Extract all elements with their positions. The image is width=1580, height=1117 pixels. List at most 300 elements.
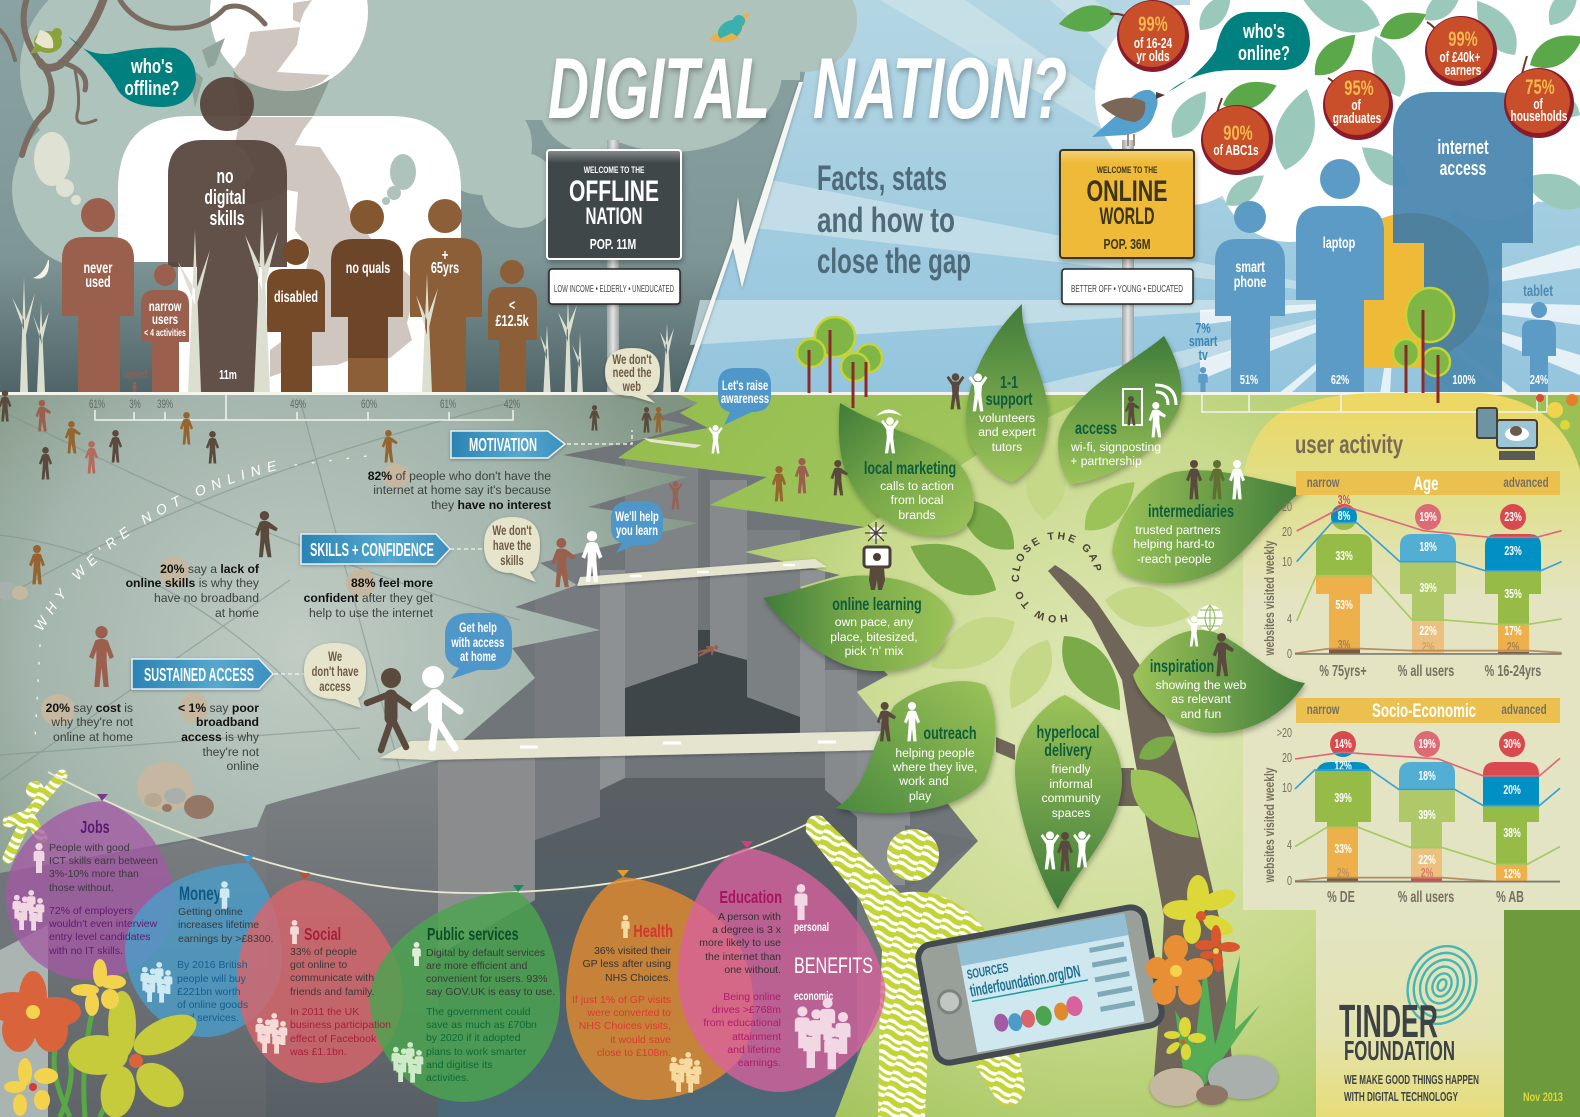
balloon text: social: friends and family.: [290, 986, 374, 998]
offline person labels: 65yrs: [431, 259, 459, 276]
chart figure: all users socio: 39%: [1418, 809, 1436, 822]
balloon text: money: £221bn worth: [177, 986, 241, 998]
speech: we don't have access: [304, 643, 366, 708]
outreach text: outreach: [923, 724, 977, 744]
chart figure: all users socio: 22%: [1418, 854, 1436, 867]
local marketing text: from local: [891, 493, 943, 507]
balloon text: money: Getting online: [178, 906, 243, 918]
panel: user activity: [1243, 393, 1580, 910]
speech bubble: who's offline: [68, 36, 196, 107]
balloon text: money: earnings by >£8300.: [178, 933, 273, 945]
sign: offline nation: NATION: [586, 203, 642, 230]
access text: [1070, 419, 1161, 468]
statistic: broadband: broadband: [196, 715, 259, 729]
1-1 support text: and expert: [978, 425, 1036, 439]
balloon text: jobs: 3%-10% more than: [49, 868, 139, 880]
hyperlocal delivery text: friendly: [1051, 762, 1092, 776]
chart figure: DE: 33%: [1334, 843, 1352, 856]
sign post: offline: [607, 140, 619, 410]
person: yellow sun figure: [1364, 215, 1424, 368]
speech: get help with access at home: [445, 613, 512, 679]
logo: tinder foundation: [1339, 995, 1455, 1066]
balloon text: jobs: with no IT skills.: [48, 945, 123, 957]
tablet device: tinderfoundation.org/DN: [968, 962, 1082, 1001]
offline person labels: 11m: [219, 369, 237, 382]
speech: we don't have access: access: [319, 679, 351, 694]
curved label: why we're not online: WHY WE'RE NOT ONLINE: [34, 460, 276, 630]
axis label: age chart: websites visited weekly: [1261, 540, 1277, 656]
speech: we don't need the web: We don't: [612, 352, 652, 367]
apple: graduates: [1306, 26, 1393, 140]
balloon text: health: If just 1% of GP visits: [572, 994, 671, 1006]
chart figure: all users age: 22%: [1419, 625, 1437, 638]
chart figure: AB: 12%: [1503, 868, 1521, 881]
balloon text: public services: activities.: [426, 1072, 469, 1084]
chart: socio axis ticks: 4: [1287, 839, 1292, 852]
chart figure: 75yrs: [1316, 494, 1372, 654]
speech bubble: who's offline: who's: [130, 56, 173, 78]
balloon text: health: 36% visited their: [594, 945, 671, 957]
person: internet access: [1393, 92, 1533, 393]
online learning text: place, bitesized,: [830, 630, 918, 644]
sun disc: [1333, 213, 1489, 361]
chart figure: DE: 12%: [1334, 760, 1352, 773]
speech: let's raise awareness: [718, 368, 771, 425]
online learning text: pick 'n' mix: [845, 644, 903, 658]
speech bubble: who's online: who's: [1242, 21, 1285, 43]
balloon text: education and benefits: from educational: [703, 1017, 781, 1029]
label: smart tv: tv: [1198, 346, 1208, 363]
balloon text: health: were converted to: [587, 1007, 671, 1019]
intermediaries text: intermediaries: [1148, 502, 1234, 522]
chart: socio axis ticks: 0: [1287, 875, 1292, 888]
inspiration text: inspiration: [1150, 657, 1214, 677]
tag: motivation: [451, 431, 565, 458]
inspiration text: and fun: [1181, 707, 1221, 721]
chasm base: [0, 393, 1010, 1117]
people crossing: skills bridge: [551, 531, 602, 587]
dotted trail: [35, 455, 375, 740]
speech: let's raise awareness: Let's raise: [722, 378, 769, 393]
inspiration text: [1150, 657, 1247, 721]
statistic: motivation: internet at home say it's because: [373, 483, 551, 497]
figures: outreach: [877, 702, 920, 741]
balloon text: education and benefits: Education: [719, 888, 782, 908]
offline person labels: skills: [209, 206, 245, 230]
chart figure: all users age: 2%: [1422, 641, 1435, 654]
chart figure: 75yrs: 33%: [1335, 550, 1353, 563]
speech: we don't need the web: [605, 348, 660, 403]
ruler: offline percentages: 42%: [504, 399, 520, 411]
balloon text: education and benefits: personal: [794, 922, 829, 934]
outreach text: helping people: [895, 746, 975, 760]
trees on horizon: [797, 317, 882, 408]
chart figure: all users age: 18%: [1419, 541, 1437, 554]
apple: graduates: of: [1351, 97, 1362, 113]
leaf: 1-1 support: [966, 304, 1048, 482]
chart figure: all users socio: 18%: [1418, 770, 1436, 783]
statistic: motivation: 82% of people who don't have the: [368, 469, 551, 483]
chart figure: AB: 38%: [1503, 827, 1521, 840]
tree trunk: [1048, 565, 1235, 1090]
offline person labels: used: [85, 273, 111, 290]
flowers by tree: [1146, 875, 1260, 1085]
label: tablet: tablet: [1523, 281, 1553, 299]
outreach text: where they live,: [892, 760, 977, 774]
apple: ABC1s: [1201, 73, 1281, 175]
balloon text: education and benefits: Being online: [723, 991, 781, 1003]
axis labels: socio: [1327, 888, 1524, 905]
online person labels: 51%: [1240, 374, 1258, 387]
outreach text: [892, 724, 977, 803]
statistic: broadband: [178, 701, 260, 773]
icon: umbrella figure: [876, 410, 902, 453]
apple: 40k earners: 99%: [1448, 27, 1478, 51]
statistic: broadband: online: [226, 759, 259, 773]
apple: ABC1s: of ABC1s: [1213, 142, 1259, 158]
leaf: hyperlocal delivery: [1015, 695, 1122, 909]
statistic: confidence: 88% feel more: [351, 576, 433, 590]
axis labels: age: % 16-24yrs: [1485, 662, 1541, 679]
chart: age axis ticks: 4: [1287, 613, 1292, 626]
online person labels: phone: [1234, 273, 1266, 290]
access text: access: [1075, 419, 1117, 439]
online person labels: internet: [1437, 135, 1489, 159]
person: tablet: [1522, 302, 1556, 393]
large fingerprint figure: [806, 815, 1025, 1117]
online learning text: own pace, any: [835, 615, 914, 629]
statistic: confidence: [304, 576, 434, 620]
person: laptop: [1296, 159, 1384, 393]
balloon text: public services: The government could: [426, 1006, 531, 1018]
outreach text: work and: [898, 774, 949, 788]
chart figure: all users age: 19%: [1419, 511, 1437, 524]
online learning text: [830, 595, 922, 658]
balloon text: jobs: People with good: [49, 842, 130, 854]
balloon text: education and benefits: A person with: [718, 911, 781, 923]
sign: offline demographics: [549, 269, 680, 304]
balloon text: education and benefits: a degree is 3 x: [712, 924, 782, 936]
apple: households: [1504, 25, 1580, 138]
statistic: confidence: help to use the internet: [309, 606, 434, 620]
chart: age axis ticks: 0: [1287, 648, 1292, 661]
chart figure: 16-24yrs: 17%: [1504, 625, 1522, 638]
crescent moon: [33, 260, 49, 279]
statistic: cost: why they're not: [50, 715, 134, 729]
bare white trees: [12, 207, 674, 415]
balloon text: public services: Public services: [427, 925, 519, 945]
speech: let's raise awareness: awareness: [721, 391, 769, 406]
axis labels: socio: % all users: [1398, 888, 1454, 905]
chart figure: DE: [1315, 731, 1371, 882]
chart header: age: advanced: [1503, 474, 1549, 490]
figures: intermediaries: [1186, 460, 1245, 499]
chart figure: 16-24yrs: 23%: [1504, 511, 1522, 524]
balloon text: education and benefits: attainment: [732, 1031, 781, 1043]
person: 65yrs: [410, 199, 482, 393]
chart figure: all users age: [1400, 504, 1456, 654]
offline person labels: no: [216, 164, 234, 188]
bridge 1: [643, 438, 702, 448]
small striped figure: [8, 775, 62, 858]
ruler: offline percentages: 3%: [129, 399, 141, 411]
label: smart tv: smart: [1189, 332, 1218, 349]
chart: socio axis ticks: >20: [1277, 727, 1292, 740]
white tree canopy behind the apples: [1095, 0, 1580, 245]
logo strapline: WITH DIGITAL TECHNOLOGY: [1344, 1090, 1458, 1104]
speech: we don't have the skills: skills: [500, 553, 524, 568]
inspiration text: showing the web: [1156, 678, 1247, 692]
ruler: offline percentages: [89, 393, 520, 420]
logo strapline: [1344, 1073, 1479, 1104]
1-1 support text: volunteers: [979, 411, 1035, 425]
rocks behind statistics: [41, 464, 410, 726]
sign: online demographics: [1062, 269, 1193, 304]
balloon text: health: [572, 915, 701, 1093]
circular label: how to close the gap: HOW TO CLOSE THE GAP: [1012, 532, 1102, 622]
balloon text: social: business participation: [290, 1019, 391, 1031]
leaf: outreach: [835, 681, 996, 813]
balloon text: jobs: Jobs: [80, 818, 110, 838]
bridge 2: [577, 559, 827, 586]
local marketing text: calls to action: [880, 479, 954, 493]
1-1 support text: support: [986, 390, 1032, 410]
chart header: age: [1296, 471, 1560, 495]
people crossing: access bridge: [367, 666, 460, 750]
chart figure: 75yrs: 8%: [1338, 510, 1351, 523]
chart figure: all users socio: 19%: [1418, 738, 1436, 751]
online person labels: access: [1440, 156, 1486, 180]
tag: motivation: MOTIVATION: [469, 435, 537, 455]
speech: we don't need the web: web: [622, 379, 641, 394]
apple: households: 75%: [1525, 75, 1555, 99]
leaf: intermediaries: [1112, 470, 1305, 583]
hyperlocal delivery text: community: [1042, 791, 1101, 805]
tree branches top left: [0, 0, 265, 155]
speech bubble: who's online: [1168, 12, 1310, 92]
people wandering offline: [0, 390, 848, 687]
balloon text: education and benefits: BENEFITS: [794, 953, 873, 978]
tree branches: [996, 737, 1140, 806]
person: smart phone: [1215, 201, 1285, 393]
offline person labels: £12.5k: [496, 312, 529, 329]
sign: offline demographics: LOW INCOME • ELDERLY • UNEDUCATED: [554, 284, 674, 295]
sign: online world: POP. 36M: [1103, 235, 1151, 252]
ruler: offline percentages: 60%: [361, 399, 377, 411]
statistic: skills lack: online skills is why they: [126, 576, 260, 590]
panel foot: [1316, 910, 1504, 1117]
speech: we don't have the skills: We don't: [492, 523, 532, 538]
balloon text: money: [140, 881, 273, 1024]
green land: [618, 393, 1580, 1117]
ruler: online percentages: [1202, 394, 1547, 412]
lightning bolt divider: [678, 82, 803, 393]
apple: graduates: 95%: [1344, 76, 1374, 100]
balloon text: education and benefits: earnings.: [738, 1057, 781, 1069]
balloon text: public services: plans to work smarter: [426, 1046, 527, 1058]
speech bubble: who's offline: offline?: [124, 78, 180, 100]
apple: ABC1s: 90%: [1223, 121, 1253, 145]
hyperlocal delivery text: delivery: [1044, 741, 1092, 761]
offline person labels: no quals: [346, 259, 390, 276]
balloon text: health: NHS Choices visits,: [579, 1020, 671, 1032]
apple: 16-24 yr olds: yr olds: [1136, 48, 1170, 64]
chart header: socio-economic: narrow: [1307, 701, 1340, 717]
balloon text: jobs: those without.: [49, 882, 114, 894]
balloon text: social: Social: [304, 925, 341, 945]
thought bubbles right: [382, 154, 416, 205]
horizon line: [0, 392, 1580, 395]
sign: offline nation: OFFLINE: [569, 175, 659, 208]
intermediaries text: helping hard-to: [1133, 537, 1215, 551]
balloon text: money: of online goods: [177, 999, 248, 1011]
balloon text: money: By 2016 British: [177, 959, 248, 971]
barbed wire: [0, 400, 520, 780]
statistic: motivation: they have no interest: [431, 498, 551, 512]
date: Nov 2013: [1523, 1090, 1563, 1104]
chart: age axis ticks: >20: [1277, 501, 1292, 514]
balloon text: education and benefits: and lifetime: [727, 1044, 781, 1056]
speech: we'll help you learn: We'll help: [615, 509, 659, 524]
ruler: offline percentages: 49%: [290, 399, 306, 411]
balloon text: social: communicate with: [290, 972, 374, 984]
person: no digital skills: [168, 77, 287, 393]
balloon text: health: Health: [633, 922, 673, 942]
leaf: inspiration: [1133, 630, 1305, 733]
balloon text: education and benefits: more likely to use: [699, 937, 781, 949]
icon: orange and teal bird: [709, 12, 750, 44]
left plateau: [0, 393, 700, 873]
balloon shapes: [6, 794, 885, 1102]
balloon text: jobs: [12, 818, 158, 957]
balloon text: health: close to £108m.: [597, 1047, 671, 1059]
icon: computer and bird: [1477, 408, 1537, 460]
sign: offline nation: POP. 11M: [590, 235, 636, 252]
rope: [48, 772, 815, 893]
sign: online world: [1060, 150, 1194, 258]
balloon text: health: GP less after using: [582, 958, 671, 970]
balloon text: public services: Digital by default services: [426, 947, 545, 959]
balloon text: public services: are more efficient and: [426, 960, 528, 972]
rocks: [0, 582, 214, 819]
green land upper tint: [618, 393, 1100, 527]
chart figure: 16-24yrs: 23%: [1504, 545, 1522, 558]
tag: skills and confidence: [301, 534, 450, 564]
speech: we don't have access: don't have: [312, 664, 359, 679]
figures: hyperlocal: [1041, 831, 1091, 871]
apple: 40k earners: earners: [1445, 62, 1481, 78]
chart figure: 16-24yrs: 2%: [1507, 641, 1520, 654]
balloon text: money: people will buy: [177, 973, 247, 985]
chasm floor and rock walls: [0, 455, 978, 1117]
icon: door and wifi: [1123, 385, 1176, 437]
speech: get help with access at home: with access: [451, 635, 504, 650]
hyperlocal delivery text: [1037, 723, 1101, 820]
apple: 40k earners: of £40k+: [1440, 49, 1480, 65]
speech: get help with access at home: at home: [460, 649, 497, 664]
chart figure: 75yrs: 3%: [1338, 494, 1351, 507]
balloon text: money: Money: [179, 884, 222, 905]
logo: tinder foundation: TINDER: [1339, 995, 1438, 1047]
online person labels: [1234, 135, 1548, 387]
title: DIGITAL: [548, 41, 770, 137]
person: under 12.5k: [488, 260, 537, 393]
title: NATION?: [813, 41, 1067, 137]
ruler: offline percentages: 61%: [89, 399, 105, 411]
tag: sustained access: SUSTAINED ACCESS: [144, 665, 254, 685]
chart: age axis ticks: [1277, 501, 1292, 661]
balloon text: money: increases lifetime: [178, 919, 259, 931]
white map silhouette person: [118, 0, 461, 394]
axis label: socio chart: websites visited weekly: [1261, 767, 1277, 883]
apple: 40k earners: [1375, 4, 1497, 86]
teal foliage: [1162, 0, 1580, 218]
ruler: offline percentages: 39%: [157, 399, 173, 411]
icon: blue bird on sign: [1092, 90, 1165, 146]
subtitle: and how to: [817, 201, 955, 240]
flowers bottom left: [0, 959, 203, 1117]
intermediaries text: [1133, 502, 1234, 566]
access text: wi-fi, signposting: [1070, 440, 1161, 454]
tablet device: SOURCES: [966, 960, 1010, 982]
apple: 16-24 yr olds: 99%: [1138, 12, 1168, 36]
balloon text: education and benefits: one without.: [724, 964, 781, 976]
statistic: motivation: [368, 469, 551, 512]
leaf: online learning: [763, 576, 953, 671]
chart: socio axis ticks: [1277, 727, 1292, 888]
logo: tinder foundation: FOUNDATION: [1344, 1035, 1455, 1066]
chart header: age: narrow: [1307, 474, 1340, 490]
chart lines: socio: [1295, 752, 1560, 882]
intermediaries text: -reach people: [1137, 552, 1211, 566]
offline person labels: never: [84, 259, 112, 276]
speech: we don't need the web: need the: [613, 365, 652, 380]
chart header: age: Age: [1413, 474, 1439, 495]
local marketing text: [864, 459, 956, 522]
statistic: skills lack: have no broadband: [154, 591, 259, 605]
chart lines: age: [1295, 506, 1562, 654]
background: online sky with sun rays: [684, 0, 1580, 394]
balloon text: social: was £1.1bn.: [289, 1046, 347, 1058]
hyperlocal delivery text: informal: [1049, 777, 1093, 791]
tag: skills and confidence: SKILLS + CONFIDENCE: [310, 540, 434, 560]
chart figure: DE: 2%: [1337, 867, 1350, 880]
ruler: offline percentages: 61%: [440, 399, 456, 411]
1-1 support text: 1-1: [1000, 373, 1018, 393]
balloon text: public services: by 2020 if it adopted: [426, 1032, 521, 1044]
speech: we'll help you learn: [611, 501, 663, 553]
balloon text: jobs: entry level candidates: [49, 931, 151, 943]
subtitle: close the gap: [817, 242, 971, 281]
hyperlocal delivery text: spaces: [1052, 806, 1090, 820]
offline person labels: < 4 activities: [144, 327, 186, 338]
balloon text: public services: convenient for users. 93%: [426, 973, 547, 985]
axis labels: age: % 75yrs+: [1319, 662, 1367, 679]
speech: get help with access at home: Get help: [459, 620, 497, 635]
speech: we'll help you learn: you learn: [616, 523, 658, 538]
tablet device: [916, 905, 1164, 1065]
statistic: broadband: they're not: [202, 745, 260, 759]
speech: we don't have the skills: [484, 517, 540, 582]
balloon text: jobs: 72% of employers: [49, 905, 133, 917]
statistic: confidence: confident after they get: [304, 591, 434, 605]
small leaves around tree crown: [901, 438, 1214, 853]
sign: online demographics: BETTER OFF • YOUNG • EDUCATED: [1071, 284, 1183, 295]
online person labels: 62%: [1331, 374, 1349, 387]
intermediaries text: trusted partners: [1135, 523, 1221, 537]
speech: we don't have access: We: [328, 649, 343, 664]
online person labels: 24%: [1530, 374, 1548, 387]
